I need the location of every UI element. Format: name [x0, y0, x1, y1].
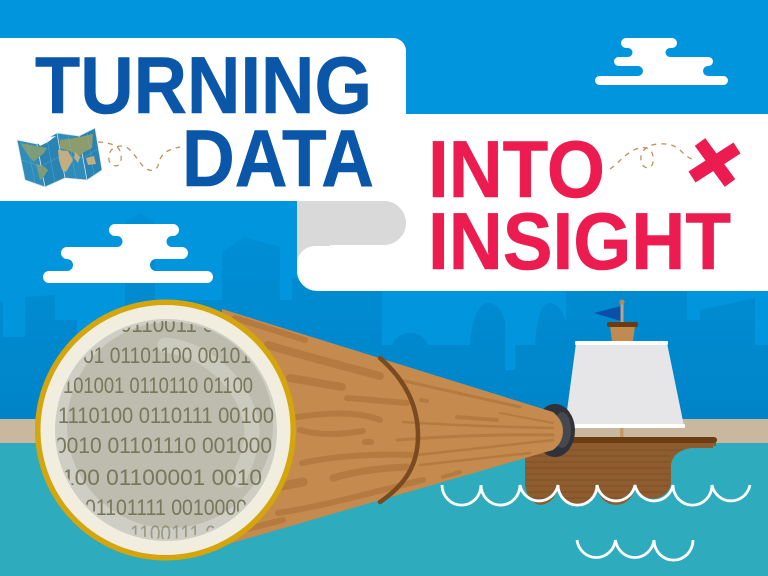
- title: turning data: DATA: [182, 114, 374, 204]
- hull: [525, 442, 716, 505]
- waves: lower: [577, 540, 693, 560]
- lens glass: [55, 319, 277, 541]
- binary text: 01 01101100 00101: [83, 343, 251, 368]
- sail top bar: [575, 341, 668, 345]
- binary text: 1110100 0110111 00100: [58, 403, 274, 428]
- city skyline: [0, 213, 768, 420]
- telescope band: [380, 358, 418, 502]
- sea: [0, 443, 768, 576]
- banner: fold backing: [320, 200, 407, 247]
- icon: red x mark: [692, 142, 737, 183]
- binary text: 0010 01101110 001000: [55, 433, 272, 458]
- telescope: [222, 309, 575, 545]
- title: into insight: INSIGHT: [428, 197, 731, 287]
- sail bottom bar: [564, 424, 685, 428]
- title: into insight: [428, 125, 731, 287]
- ship: [520, 300, 720, 508]
- lens cream ring: [40, 305, 290, 555]
- banner: right: [297, 114, 768, 291]
- crow's nest: [607, 322, 638, 341]
- telescope end ring: [535, 404, 575, 457]
- binary text: 01101111 0010000: [85, 495, 247, 520]
- trail: into to x: [610, 144, 695, 169]
- wood grain: [235, 318, 553, 530]
- waves: near ship: [442, 485, 750, 505]
- trail: map to data: [98, 142, 180, 170]
- sand strip: [0, 419, 768, 443]
- title: turning data: TURNING: [35, 41, 372, 131]
- lens inner shade: [67, 322, 273, 528]
- banner: top left: [0, 38, 406, 201]
- ship mast: [620, 426, 624, 438]
- binary text: 100 01100001 0010: [62, 465, 262, 490]
- title: turning data: [35, 41, 374, 204]
- cloud: left: [43, 224, 213, 283]
- telescope wood body: [222, 309, 563, 545]
- ship flagpole: [620, 300, 624, 323]
- binary text: 1100111 0: [130, 521, 216, 546]
- banner fold: [297, 201, 406, 270]
- lens highlight: [165, 345, 252, 480]
- binary text: 0110011 0: [120, 312, 214, 337]
- title: into insight: INTO: [428, 125, 605, 215]
- magnifying lens: [35, 300, 296, 560]
- icon: world map: [17, 128, 102, 187]
- deck: [570, 437, 717, 443]
- sail: [565, 343, 684, 426]
- ship flag: [594, 306, 621, 321]
- cloud: top right: [595, 38, 728, 85]
- binary text: 101001 0110110 01100: [63, 373, 253, 398]
- binary text: [55, 312, 274, 546]
- lens gold rim: [35, 300, 296, 560]
